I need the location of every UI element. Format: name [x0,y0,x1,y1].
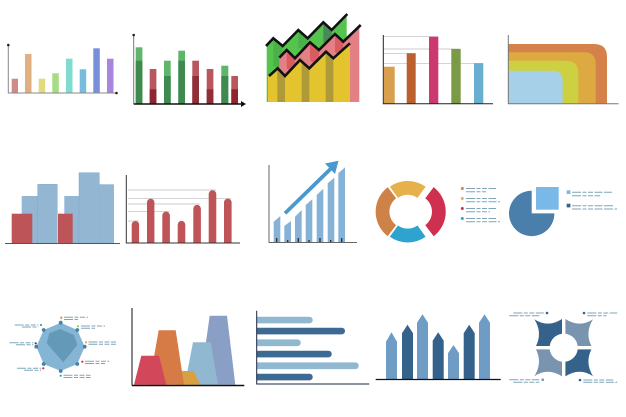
chart: green and red overlapping bars [132,34,246,107]
legend: four-piece labels [509,312,617,382]
chart: layered zigzag area chart [266,14,361,102]
legend: radar labels [10,317,116,378]
chart: overlapping blue and red blocks [5,173,120,244]
legend: donut legend [461,187,500,222]
chart: arrow-shaped bars [376,314,501,380]
chart: four-piece star ring [534,319,593,376]
chart: multicolor bar chart [7,44,118,94]
chart: rising bars with arrow [269,161,357,242]
chart: rounded red bars with gridlines [126,175,240,243]
chart: radar octagon [34,321,87,373]
chart: overlapping trapezoid areas [132,308,244,386]
chart: horizontal rounded bars [257,311,369,384]
legend: pie legend [567,190,617,209]
chart: nested rounded area chart [508,35,618,104]
chart: pie with offset quarter [509,187,559,236]
chart: bars with gridlines [383,35,493,104]
chart: donut with four segments [375,181,446,243]
